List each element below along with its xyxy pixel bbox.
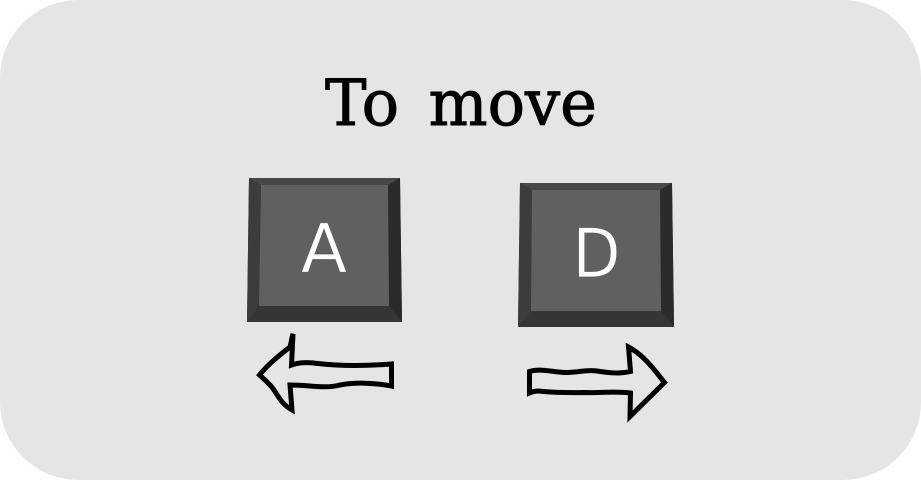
icon: A key: A <box>301 210 347 289</box>
icon: D key: D <box>572 215 620 294</box>
arrow: left <box>260 334 392 410</box>
arrow: right <box>530 347 664 416</box>
icon: A key <box>247 178 402 322</box>
icon: D key <box>518 183 674 327</box>
title: To move <box>325 67 597 141</box>
